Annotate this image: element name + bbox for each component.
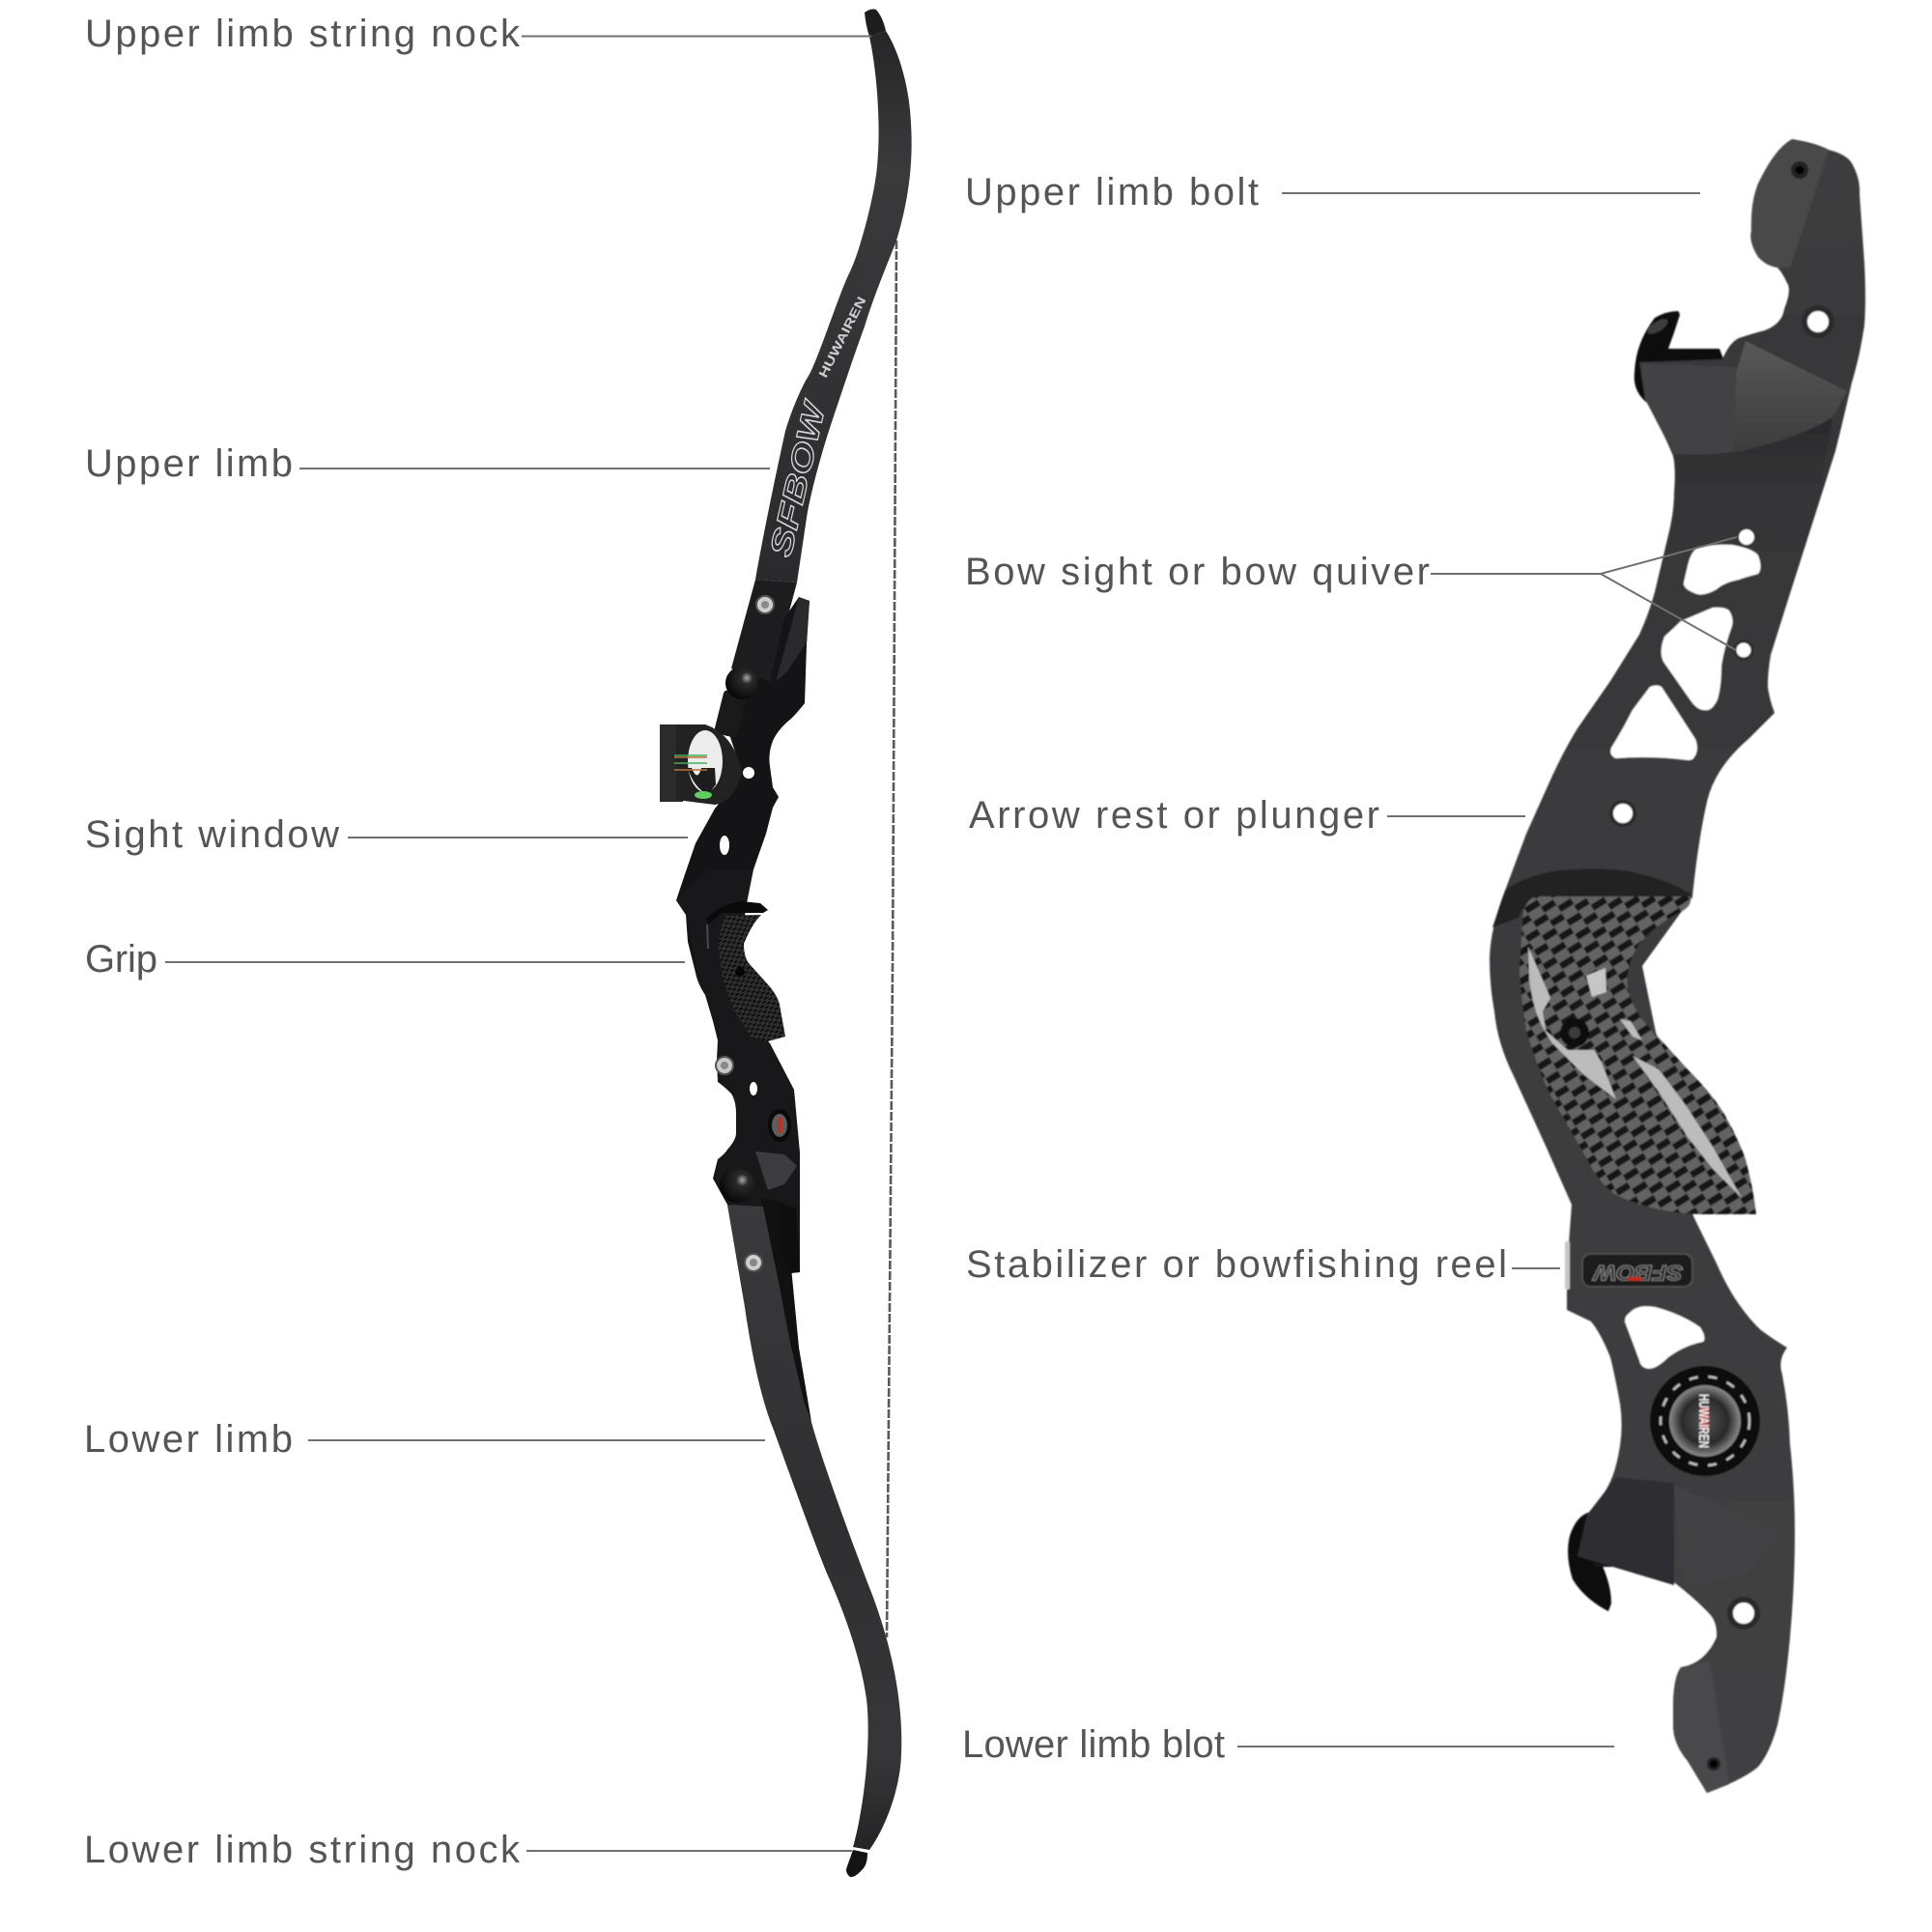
limb lettering — [763, 295, 868, 560]
upper limb bolt knob — [1634, 311, 1724, 403]
upper riser and sight window — [676, 597, 810, 973]
sight mounting hole lower — [1735, 641, 1752, 659]
lower limb bolt knob — [1568, 1512, 1654, 1611]
grip screw — [735, 967, 745, 977]
grip highlight right — [1633, 1056, 1742, 1198]
lower bracket — [780, 1205, 800, 1273]
bow sight — [660, 724, 754, 805]
shadow band below shelf — [1674, 417, 1833, 502]
label: Bow sight or bow quiver — [965, 537, 1737, 650]
label: Upper limb string nock: Upper limb string nock — [85, 13, 521, 55]
central body and grip back — [676, 869, 800, 1301]
upper limb bolt screw — [1791, 161, 1808, 179]
riser medallion — [768, 1109, 791, 1142]
lower limb bolt screw — [1707, 1757, 1720, 1771]
label: Arrow rest or plunger: Arrow rest or plunger — [969, 794, 1379, 837]
grip highlight left — [1528, 947, 1616, 1099]
label: Lower limb string nock: Lower limb string nock — [84, 1829, 521, 1871]
lower string nock — [846, 1850, 867, 1877]
upper string nock — [865, 9, 886, 37]
upper limb — [755, 31, 912, 582]
riser side plate — [1565, 1241, 1692, 1290]
textured grip — [718, 915, 785, 1041]
lower shelf light facet — [1674, 1486, 1780, 1588]
medallion: HUWAIREN — [1695, 1394, 1712, 1448]
shelf right facet — [1734, 341, 1847, 452]
lower facet — [755, 1151, 797, 1190]
grip top band — [1492, 869, 1692, 927]
upper limb pivot hole — [1804, 308, 1832, 335]
lower limb bolt knob — [720, 1168, 754, 1203]
grip highlight patch — [1586, 968, 1606, 997]
limb bracket — [776, 597, 810, 682]
grip lip — [707, 901, 768, 924]
upper limb screw — [756, 596, 774, 613]
lower limb pivot hole — [1730, 1600, 1757, 1627]
bow string — [887, 241, 896, 1637]
plunger hole — [1611, 802, 1634, 825]
limb lettering: SFBOW — [763, 396, 833, 560]
grip screw — [1560, 1018, 1589, 1047]
window holes — [1610, 545, 1760, 1369]
sight window opening — [720, 836, 729, 855]
head facet — [1750, 139, 1829, 268]
medallion — [1650, 1366, 1760, 1476]
limb lettering: HUWAIREN — [815, 295, 868, 380]
shelf left facet — [1641, 363, 1736, 455]
lower shelf facet — [1577, 1477, 1674, 1585]
carbon fibre grip — [1520, 896, 1756, 1214]
lower riser window — [750, 1082, 757, 1095]
grip highlight small — [1620, 1019, 1642, 1040]
lower limb dark edge band — [761, 1198, 811, 1422]
riser side plate: SFBOW — [1592, 1261, 1683, 1285]
label: Lower limb: Lower limb — [84, 1418, 293, 1461]
grip side highlight — [707, 924, 708, 949]
panel: full bow side view — [660, 9, 912, 1877]
panel: riser detail view — [1490, 139, 1865, 1793]
lower limb screw — [745, 1254, 762, 1271]
riser body — [1490, 139, 1865, 1793]
lower limb — [727, 1205, 901, 1850]
lower head facet — [1673, 1662, 1729, 1793]
upper limb bolt knob — [714, 667, 758, 738]
limb butt section — [731, 580, 797, 684]
label: Lower limb blot: Lower limb blot — [962, 1723, 1225, 1766]
label: Stabilizer or bowfishing reel: Stabilizer or bowfishing reel — [966, 1243, 1507, 1286]
label: Sight window: Sight window — [85, 813, 339, 856]
lower riser screw — [716, 1057, 733, 1074]
label: Bow sight or bow quiver: Bow sight or bow quiver — [965, 551, 1430, 593]
label: Upper limb: Upper limb — [85, 442, 293, 485]
sight mounting hole upper — [1738, 528, 1755, 546]
label: Grip: Grip — [85, 938, 157, 980]
label: Upper limb bolt: Upper limb bolt — [965, 171, 1259, 213]
